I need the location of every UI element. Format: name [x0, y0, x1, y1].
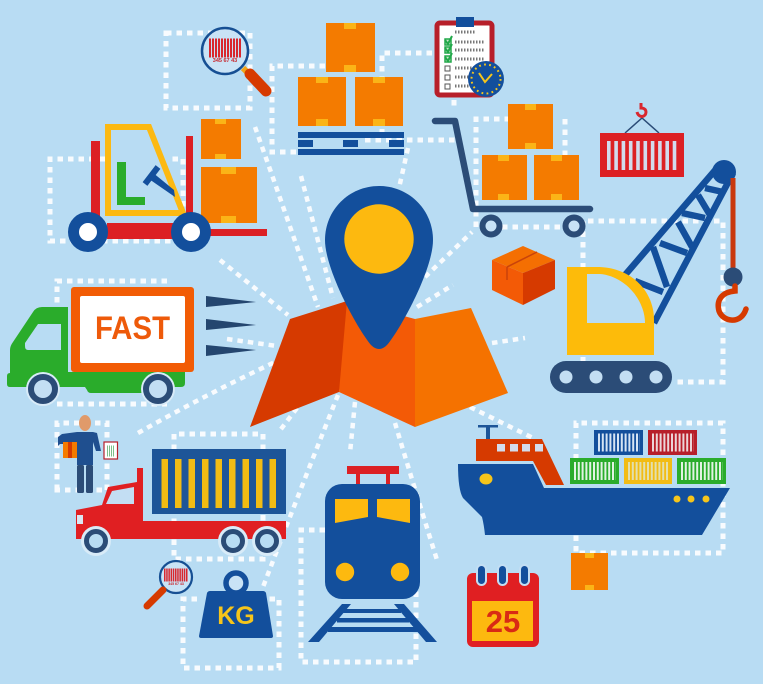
icon: train on tracks: [308, 466, 437, 642]
icon: fast delivery truck: [7, 287, 194, 406]
icon: container truck: [76, 449, 286, 556]
icon: folded map: [250, 301, 508, 427]
icon: forklift with boxes: [74, 119, 267, 246]
icon: KG weight: KG: [217, 602, 255, 630]
icon: barcode magnifier: 345 67 43: [213, 58, 237, 64]
icon: worker with box and clipboard: [58, 415, 118, 493]
icon: boxes on pallet: [298, 23, 404, 155]
icon: checklist clipboard with clock: [437, 17, 504, 97]
icon: fast delivery truck: FAST: [95, 310, 170, 346]
icon: calendar: 25: [486, 604, 520, 639]
icon: location pin: [325, 186, 433, 349]
icon: cargo ship: [458, 425, 730, 535]
icon: KG weight: [199, 573, 273, 638]
icon: small barcode magnifier: 345 67 43: [168, 582, 184, 586]
icon: hanging container: [600, 103, 684, 177]
icon: crane: [550, 160, 746, 393]
icon: barcode magnifier: [202, 28, 266, 91]
icon: small barcode magnifier: [147, 561, 192, 606]
icon: box below ship: [571, 553, 608, 590]
icon: speed lines: [206, 296, 256, 356]
icon: shopping cart with boxes: [435, 104, 590, 234]
icon: calendar: [467, 565, 539, 647]
icon: cardboard box: [492, 246, 555, 305]
